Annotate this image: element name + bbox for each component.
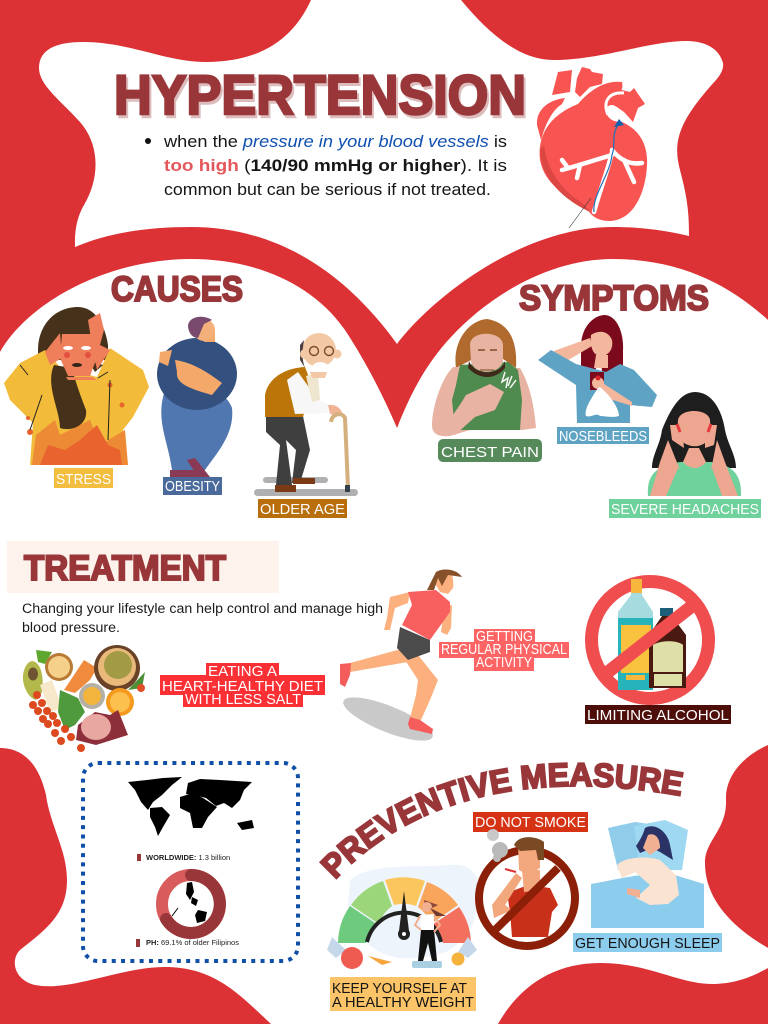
label: healthy weight — [330, 977, 476, 1011]
background: right red blob — [705, 745, 768, 948]
illustration: older man with cane — [254, 333, 358, 496]
label: nosebleeds: NOSEBLEEDS — [559, 428, 647, 445]
label: obesity: OBESITY — [165, 478, 220, 495]
label: heart-healthy diet: WITH LESS SALT — [185, 691, 301, 708]
intro text — [22, 601, 383, 635]
illustration: no smoking — [479, 829, 575, 946]
illustration: stressed woman — [4, 307, 149, 465]
donut chart: Philippines — [162, 875, 220, 933]
heading: causes: CAUSES — [111, 270, 243, 309]
label: regular physical activity — [439, 628, 569, 671]
label: heart-healthy diet — [160, 663, 325, 708]
label: severe headaches: SEVERE HEADACHES — [611, 501, 759, 518]
label: regular physical activity: REGULAR PHYSICAL — [441, 641, 567, 658]
heading: symptoms: SYMPTOMS — [519, 279, 709, 318]
label: healthy weight: A HEALTHY WEIGHT — [332, 994, 474, 1011]
background: red top field — [0, 0, 768, 540]
label: do not smoke: DO NOT SMOKE — [475, 814, 586, 831]
label: chest pain: CHEST PAIN — [441, 444, 539, 461]
dotted frame — [83, 763, 298, 961]
worldwide statistic: WORLDWIDE: 1.3 billion — [146, 853, 230, 862]
illustration: obese person — [157, 317, 237, 477]
label: regular physical activity: GETTING — [476, 628, 533, 645]
definition text block — [145, 133, 507, 199]
illustration: heart-healthy food — [23, 645, 145, 752]
label: heart-healthy diet: EATING A — [208, 663, 277, 680]
label: stress: STRESS — [56, 471, 111, 488]
intro text: blood pressure. — [22, 620, 120, 635]
label: healthy weight: KEEP YOURSELF AT — [332, 980, 467, 997]
background: bottom-left red blob — [0, 748, 271, 1024]
panel: statistics — [83, 763, 298, 961]
title: HYPERTENSION — [116, 66, 528, 129]
label: regular physical activity: ACTIVITY — [476, 654, 532, 671]
definition text block: common but can be serious if not treated. — [164, 181, 491, 199]
illustration: severe headache — [648, 392, 741, 496]
label: get enough sleep: GET ENOUGH SLEEP — [575, 935, 720, 952]
label: heart-healthy diet: HEART-HEALTHY DIET — [162, 678, 323, 695]
definition text block: when the pressure in your blood vessels is — [163, 133, 507, 151]
icon: heart — [537, 67, 647, 228]
panel: causes — [4, 270, 358, 518]
illustration: runner — [339, 569, 462, 749]
label: older age: OLDER AGE — [260, 501, 345, 518]
label: limiting alcohol: LIMITING ALCOHOL — [587, 707, 729, 724]
illustration: chest pain — [432, 319, 536, 436]
illustration: sleeping woman — [591, 820, 704, 928]
illustration: weight gauge — [327, 865, 479, 969]
panel: preventive measure — [319, 762, 722, 1011]
icon: no alcohol — [592, 579, 708, 698]
title: HYPERTENSION — [114, 63, 526, 126]
panel: treatment — [7, 541, 731, 752]
world map — [128, 777, 254, 836]
heading: preventive measure curved: PREVENTIVE MEASURE — [319, 762, 684, 880]
definition text block: too high (140/90 mmHg or higher ). It is — [164, 157, 507, 175]
background: bottom-right red blob — [498, 963, 768, 1024]
heading background and title — [7, 541, 279, 593]
panel: symptoms — [432, 279, 761, 518]
Philippines statistic: PH: 69.1% of older Filipinos — [146, 938, 239, 947]
label: chest pain — [438, 439, 542, 462]
intro text: Changing your lifestyle can help control and manage high — [22, 601, 383, 616]
illustration: nosebleed — [538, 315, 657, 423]
heading background and title: TREATMENT — [24, 549, 226, 588]
